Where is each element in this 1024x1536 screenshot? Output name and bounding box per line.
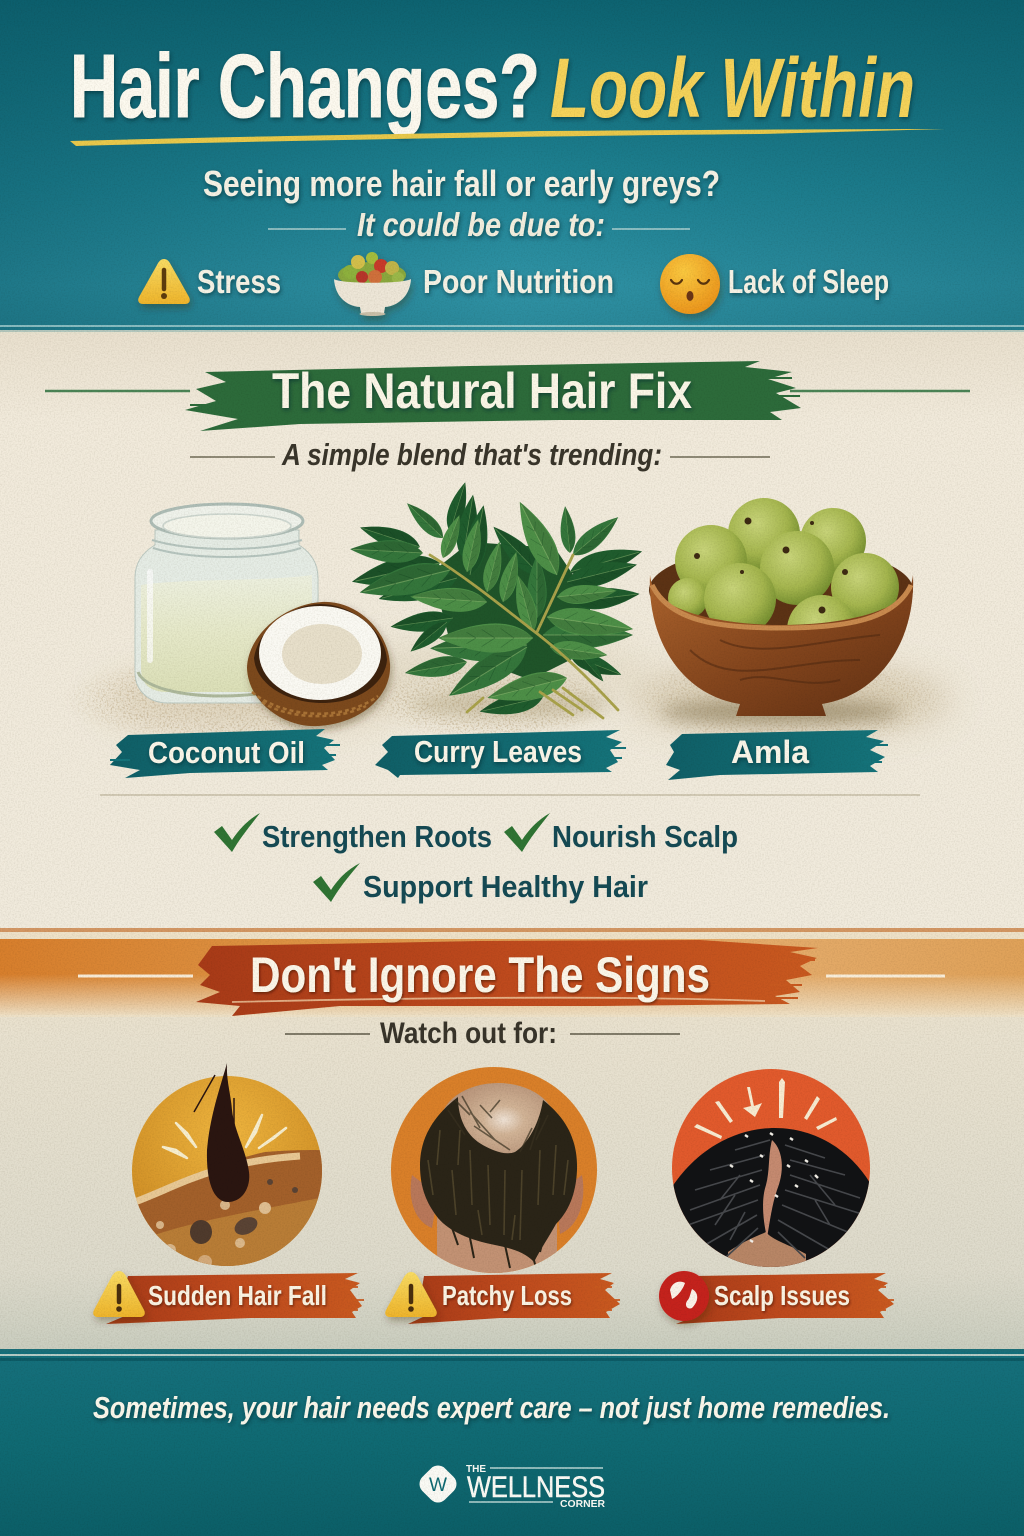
benefit: support healthy hair	[313, 863, 648, 904]
subheading: watch out for: Watch out for:	[380, 1017, 557, 1050]
ingredient: curry leaves	[349, 480, 645, 721]
label: amla: Amla	[731, 734, 809, 770]
intro text: Seeing more hair fall or early greys?	[203, 163, 720, 204]
cause: poor nutrition	[334, 252, 614, 316]
icon: warning triangle	[138, 259, 190, 304]
title	[70, 37, 945, 146]
logo: the wellness corner: CORNER	[560, 1499, 606, 1510]
icon: sleeping face	[660, 254, 720, 314]
icon: hair follicle	[207, 1063, 249, 1202]
intro text	[203, 163, 720, 243]
icon: logo mark: W	[429, 1475, 447, 1496]
badge: sudden hair fall	[93, 1271, 364, 1324]
title: Look Within	[550, 41, 915, 135]
sign: patchy loss illustration	[391, 1067, 597, 1280]
sign: sudden hair fall illustration	[130, 1063, 325, 1275]
benefit: strengthen roots: Strengthen Roots	[262, 819, 492, 854]
badge: sudden hair fall: Sudden Hair Fall	[148, 1280, 327, 1311]
ingredient: coconut oil jar and coconut	[135, 504, 390, 726]
logo: the wellness corner: WELLNESS	[467, 1471, 605, 1504]
cause: stress	[138, 259, 281, 304]
cause: lack of sleep: Lack of Sleep	[728, 263, 889, 300]
benefit: nourish scalp	[504, 813, 738, 854]
benefit: support healthy hair: Support Healthy Hair	[363, 869, 648, 904]
benefit: nourish scalp: Nourish Scalp	[552, 819, 738, 854]
label: coconut oil	[110, 729, 340, 778]
cause: stress: Stress	[197, 263, 281, 300]
badge: patchy loss	[385, 1272, 620, 1324]
label: amla	[666, 730, 888, 780]
icon: wooden bowl	[650, 575, 913, 716]
icon: warning triangle	[385, 1272, 437, 1317]
sign: scalp issues illustration	[672, 1069, 870, 1275]
intro text: It could be due to:	[357, 206, 605, 243]
icon: glass jar	[135, 504, 318, 703]
subheading: a simple blend: A simple blend that's trending:	[281, 437, 662, 472]
badge: scalp issues	[659, 1271, 894, 1324]
icon: coconut half	[247, 602, 390, 726]
label: curry leaves	[375, 730, 626, 778]
heading: the natural hair fix	[45, 361, 970, 431]
logo: the wellness corner	[415, 1461, 606, 1510]
badge: scalp issues: Scalp Issues	[714, 1280, 850, 1311]
icon: logo mark	[415, 1461, 461, 1507]
icon: warning triangle	[93, 1271, 145, 1317]
label: coconut oil: Coconut Oil	[148, 735, 305, 770]
label: curry leaves: Curry Leaves	[414, 734, 582, 769]
heading: don't ignore the signs: Don't Ignore The Signs	[250, 947, 710, 1003]
heading: don't ignore the signs	[78, 940, 945, 1016]
badge: patchy loss: Patchy Loss	[442, 1280, 572, 1311]
ground shading under ingredients	[60, 640, 960, 750]
logo: the wellness corner: THE	[466, 1464, 486, 1475]
icon: green check	[313, 863, 360, 902]
icon: green check	[504, 813, 550, 852]
icon: salad bowl	[334, 252, 411, 316]
icon: amla fruits	[668, 498, 899, 665]
title: Hair Changes?	[70, 37, 540, 137]
cause: poor nutrition: Poor Nutrition	[423, 263, 614, 300]
heading: the natural hair fix: The Natural Hair Fix	[272, 363, 692, 419]
benefit: strengthen roots	[214, 813, 492, 854]
icon: red scalp symbol	[659, 1271, 709, 1321]
icon: green check	[214, 813, 260, 852]
ingredient: amla bowl	[649, 498, 913, 724]
cause: lack of sleep	[660, 254, 889, 314]
